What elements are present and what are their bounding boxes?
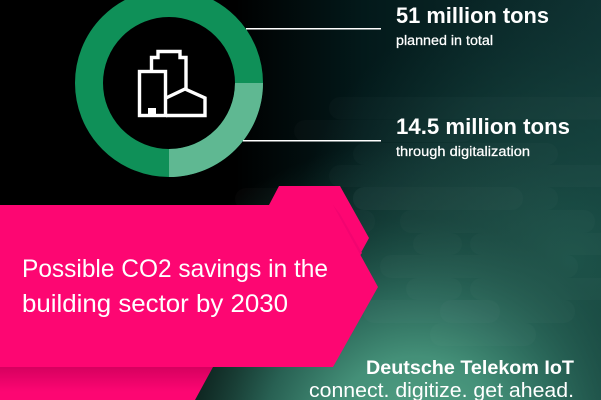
brand text — [309, 358, 574, 400]
stat: 14.5 million tons: through digitalization — [396, 144, 530, 159]
magenta back arrow — [269, 186, 369, 258]
stat: 51 million tons — [396, 3, 549, 48]
icon: buildings — [140, 52, 205, 116]
connector line: total — [246, 28, 381, 30]
stat: 14.5 million tons: 14.5 million tons — [396, 114, 570, 139]
stat: 51 million tons: planned in total — [396, 33, 493, 48]
background pills — [235, 97, 601, 346]
stat: 51 million tons: 51 million tons — [396, 3, 549, 28]
heading — [22, 255, 328, 318]
heading: building sector by 2030 — [22, 290, 288, 318]
heading: Possible CO2 savings in the — [22, 255, 328, 283]
connector line: digitalization — [243, 140, 381, 142]
brand text: Deutsche Telekom IoT — [366, 358, 574, 379]
magenta main arrow — [0, 205, 378, 367]
magenta lower arrow — [0, 367, 213, 400]
digitalization segment — [169, 83, 263, 177]
stat: 14.5 million tons — [396, 114, 570, 159]
donut chart — [89, 3, 263, 177]
